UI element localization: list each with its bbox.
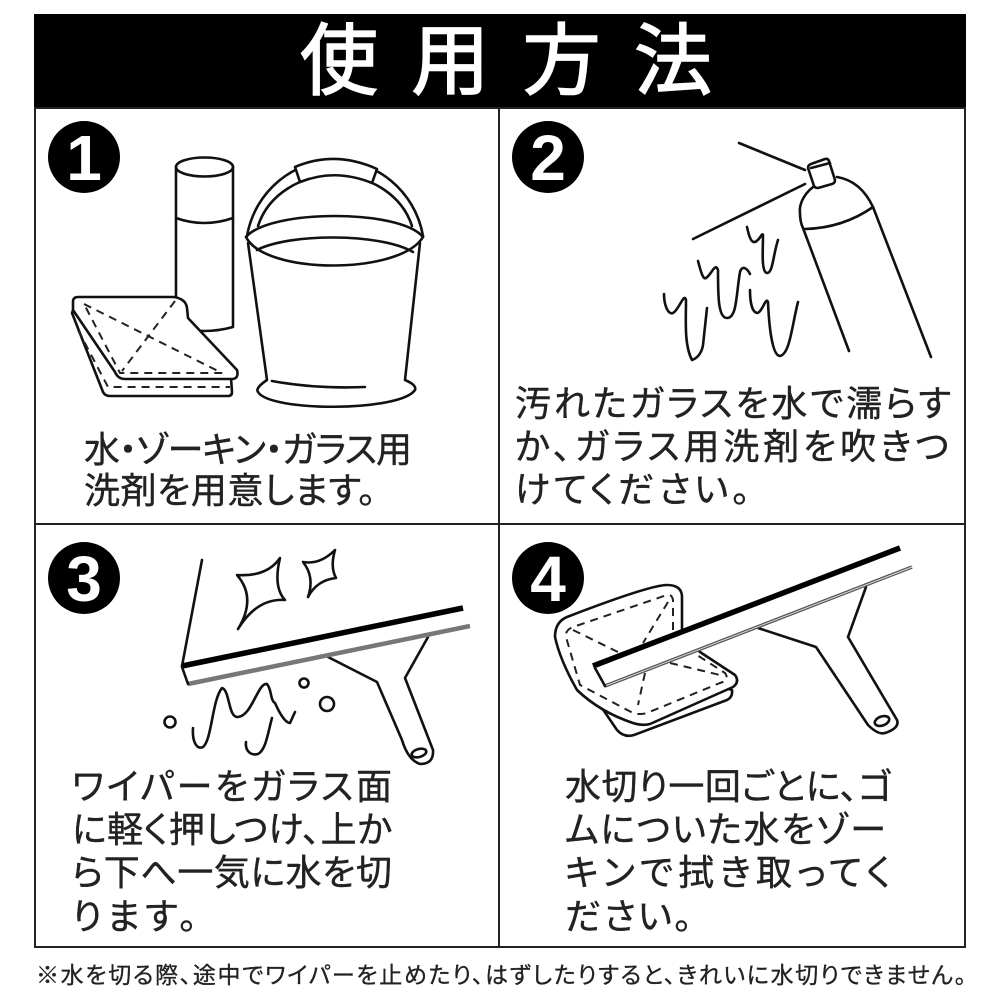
caption step 2: けてください。 — [515, 469, 750, 510]
caption step 3 — [72, 766, 392, 937]
dirt streaks — [193, 684, 295, 754]
icon: folded cloth — [72, 297, 238, 396]
caption step 2 — [515, 383, 951, 510]
icon: window edge — [182, 560, 202, 666]
spray lines — [693, 143, 805, 239]
icon: sparkles — [237, 550, 336, 629]
caption step 2: か、ガラス用洗剤を吹きつ — [515, 426, 949, 467]
step number 4: 4 — [530, 543, 566, 615]
caption step 1: 水・ゾーキン・ガラス用 — [84, 429, 412, 470]
caption step 3: ります。 — [72, 896, 197, 937]
panel: step 4 — [512, 542, 912, 937]
caption step 3: ワイパーをガラス面 — [72, 766, 392, 807]
caption step 4: ムについた水をゾー — [565, 809, 886, 850]
panel: step 2 — [512, 121, 951, 510]
caption step 4 — [565, 766, 892, 937]
icon: squeegee — [182, 608, 470, 764]
caption step 3: ら下へ一気に水を切 — [72, 852, 392, 893]
caption step 2: 汚れたガラスを水で濡らす — [515, 383, 951, 424]
caption step 1: 洗剤を用意します。 — [84, 470, 376, 511]
dirt drips — [664, 227, 798, 360]
icon: spray bottle — [800, 159, 931, 357]
title banner: 使用方法 — [300, 17, 712, 105]
step number 1: 1 — [66, 122, 102, 194]
step number 1 — [48, 121, 120, 194]
icon: spray can — [176, 158, 233, 331]
caption step 4: ださい。 — [565, 896, 692, 937]
step number 4 — [512, 542, 584, 615]
title banner — [34, 14, 966, 108]
icon: cloth under squeegee — [555, 585, 737, 736]
grid frame — [35, 108, 965, 947]
step number 3: 3 — [66, 543, 102, 615]
footnote: ※水を切る際、途中でワイパーを止めたり、はずしたりすると、きれいに水切りできません。 — [36, 962, 966, 988]
caption step 1 — [84, 429, 412, 511]
step number 2 — [512, 121, 584, 194]
caption step 4: キンで拭き取ってく — [565, 852, 891, 893]
icon: squeegee over cloth — [593, 548, 912, 733]
panel: step 3 — [48, 542, 470, 937]
step number 3 — [48, 542, 120, 615]
caption step 4: 水切り一回ごとに、ゴ — [565, 766, 892, 807]
step number 2: 2 — [530, 122, 566, 194]
water drops — [164, 678, 334, 728]
icon: bucket — [246, 159, 423, 407]
caption step 3: に軽く押しつけ、上か — [72, 809, 392, 850]
panel: step 1 — [48, 121, 423, 511]
